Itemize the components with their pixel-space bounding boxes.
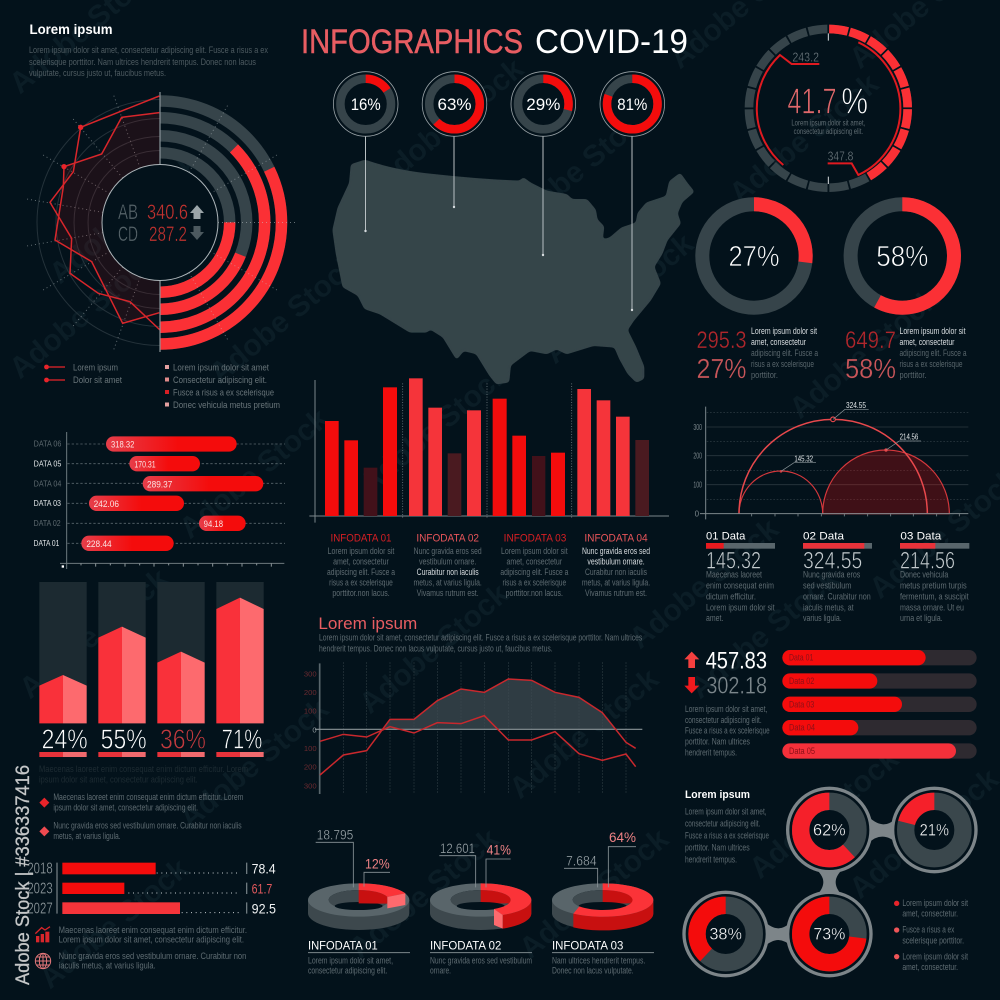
center circle values: 340.6 xyxy=(147,201,188,224)
stats block: 649.7 / 58%: 649.7 xyxy=(845,327,896,354)
center circle values: AB xyxy=(118,201,138,224)
donut: 73% xyxy=(788,892,871,976)
column: 02 data: ornare. Curabitur non xyxy=(803,591,871,601)
column: 01 data: enim consequat enim xyxy=(706,581,774,591)
text: infodata 01: risus a ex scelerisque xyxy=(329,578,393,588)
stats block: 295.3 / 27%: risus a ex scelerisque xyxy=(751,359,814,369)
bar: 71% xyxy=(216,582,264,757)
intro text: Lorem ipsum xyxy=(685,789,750,801)
stock watermark pattern: Adobe Stock xyxy=(683,562,845,705)
text: infodata 04: vestibulum ornare. xyxy=(587,557,645,567)
text: infodata 01: Lorem ipsum dolor sit xyxy=(328,546,395,556)
linked donut cluster xyxy=(684,788,976,976)
text: infodata 02: Vivamus rutrum est. xyxy=(417,588,479,598)
horizontal range bar chart: DATA 02 xyxy=(34,518,61,528)
3D donuts section xyxy=(308,827,654,976)
line chart: 200 xyxy=(304,763,317,772)
year bars: 92.5 xyxy=(252,901,276,916)
panel: intro heading and text: Lorem ipsum dolor sit amet, consectetur adipiscing elit. Fusce a risus a ex xyxy=(29,45,268,55)
bullet list: scelerisque porttitor. xyxy=(902,935,964,945)
house-shaped percent bars xyxy=(39,582,264,757)
3D donut: 64% xyxy=(552,883,653,930)
column: 02 data: iaculis metus, at xyxy=(803,602,854,612)
donut: 38% xyxy=(684,892,767,976)
text: infodata 01 xyxy=(327,532,395,598)
small donut: 63%: 63% xyxy=(438,95,472,114)
captions: Lorem ipsum dolor sit amet, xyxy=(308,955,393,965)
line chart: 200 xyxy=(304,688,317,697)
panel: radial chart xyxy=(27,92,295,352)
stock watermark pattern: Adobe Stock xyxy=(368,52,530,195)
stats block: 649.7 / 58%: porttitor. xyxy=(900,370,926,380)
stats block: 295.3 / 27%: Lorem ipsum dolor sit xyxy=(751,326,817,336)
line chart: 100 xyxy=(304,707,317,716)
description: hendrerit tempus. Donec non lacus vulputate, cursus justo ut, faucibus metus. xyxy=(319,643,553,653)
icon notes xyxy=(59,925,247,971)
stats block: 295.3 / 27%: adipiscing elit. Fusce a xyxy=(751,348,818,358)
up / down stats: 457.83 xyxy=(706,647,767,674)
bullet list: amet, consectetur. xyxy=(902,909,958,919)
horizontal range bar chart: 228.44 xyxy=(86,539,112,549)
stock watermark pattern: Adobe Stock xyxy=(783,282,945,425)
text: infodata 01: amet, consectetur xyxy=(333,557,389,567)
stats block: 649.7 / 58%: 58% xyxy=(845,353,896,384)
legend: radial chart: Fusce a risus a ex scelerisque xyxy=(173,388,274,398)
text: infodata 03 xyxy=(500,532,568,598)
line chart: 300 xyxy=(304,781,317,790)
horizontal range bar chart: DATA 03 xyxy=(34,498,61,508)
captions: INFODATA 03 xyxy=(552,938,624,952)
stats block: 649.7 / 58%: adipiscing elit. Fusce a xyxy=(900,348,966,358)
small donut: 16%: 16% xyxy=(351,95,381,114)
line chart: 100 xyxy=(304,744,317,753)
text: infodata 04: Curabitur non iaculis xyxy=(585,567,647,577)
up / down stats: consectetur adipiscing elit. xyxy=(685,715,762,725)
gauge: 41.7% xyxy=(749,29,908,188)
heading: Lorem ipsum xyxy=(318,614,417,633)
gauge: 41.7%: 41.7 xyxy=(787,80,837,121)
semicircle chart: 0 xyxy=(695,509,700,518)
year bars: 2027 xyxy=(27,900,53,917)
legend: radial chart: Lorem ipsum xyxy=(73,362,118,374)
semicircle chart xyxy=(693,400,968,519)
column: 03 data xyxy=(900,530,969,623)
stock watermark pattern: Adobe Stock xyxy=(353,357,515,500)
gauge: 41.7%: consectetur adipiscing elit. xyxy=(794,126,863,136)
donut values: 12.601 xyxy=(440,840,475,856)
text: infodata 03: Lorem ipsum dolor sit xyxy=(501,546,568,556)
year bars: 2023 xyxy=(27,881,53,898)
text: infodata 01: porttitor.non lacus. xyxy=(332,588,390,598)
year bars: 2018 xyxy=(27,861,53,878)
text: infodata 01: INFODATA 01 xyxy=(330,532,391,544)
bar: 36% xyxy=(157,582,206,757)
title: COVID-19 xyxy=(535,23,688,61)
small donut: 16% xyxy=(333,72,398,136)
stats block: 649.7 / 58% xyxy=(845,326,966,384)
pointer lines xyxy=(364,136,633,311)
captions: INFODATA 01 xyxy=(308,938,378,952)
radar chart grid and lines xyxy=(27,96,160,349)
intro text: Lorem ipsum dolor sit amet, xyxy=(685,806,767,816)
stock watermark pattern: Adobe Stock xyxy=(353,577,515,720)
stats block: 649.7 / 58%: risus a ex scelerisque xyxy=(900,359,962,369)
stock watermark pattern: Adobe Stock xyxy=(723,67,885,210)
horizontal range bar chart: DATA 04 xyxy=(34,478,61,488)
stats block: 295.3 / 27%: 295.3 xyxy=(696,327,746,354)
column: 01 data: dictum efficitur. xyxy=(706,591,756,601)
faint note: Maecenas laoreet enim consequat enim dictum efficitur. Lorem xyxy=(39,764,248,774)
title xyxy=(301,23,688,61)
progress bars: Data 02 xyxy=(789,676,814,686)
donut: 62% xyxy=(788,788,871,872)
donut values: 41% xyxy=(487,841,511,857)
diamond bullets xyxy=(39,792,243,841)
description: Lorem ipsum dolor sit amet, consectetur adipiscing elit. Fusce a risus a ex scelerisque porttitor. Nam ultrices xyxy=(319,632,643,642)
up / down stats: porttitor. Nam ultrices xyxy=(685,737,750,747)
vertical stock id: Adobe Stock | #336337416 xyxy=(12,765,34,985)
bullet list: Lorem ipsum dolor sit xyxy=(902,951,968,961)
faint note xyxy=(39,764,248,785)
intro text: porttitor. Nam ultrices xyxy=(685,842,750,852)
text: infodata 01: adipiscing elit. Fusce a xyxy=(327,567,395,577)
faint note: ipsum dolor sit amet, consectetur adipiscing elit. xyxy=(39,775,198,785)
semicircle chart: 324.55 xyxy=(846,400,866,410)
up / down stats: hendrerit tempus. xyxy=(685,748,737,758)
stock watermark pattern: Adobe Stock xyxy=(13,562,175,705)
column: 01 data: Maecenas laoreet xyxy=(706,570,762,580)
3D donut: 41% xyxy=(430,883,531,930)
text: infodata 04: INFODATA 04 xyxy=(584,532,648,544)
line chart: 300 xyxy=(304,669,317,678)
stock watermark pattern: Adobe Stock xyxy=(3,242,165,385)
captions: Nunc gravida eros sed vestibulum xyxy=(430,955,532,965)
captions: consectetur adipiscing elit. xyxy=(308,966,387,976)
progress bars: Data 03 xyxy=(789,699,814,709)
diamond bullets: metus, at varius ligula. xyxy=(53,831,121,841)
bullet list: amet, consectetur. xyxy=(902,962,958,972)
panel: intro heading and text: vulputate, cursus justo ut, faucibus metus. xyxy=(29,68,166,78)
gauge: 41.7%: 347.8 xyxy=(828,149,853,164)
text: infodata 03: adipiscing elit. Fusce a xyxy=(500,567,568,577)
captions xyxy=(308,938,654,976)
column: 02 data: 02 Data xyxy=(803,530,844,542)
panel: intro heading and text: Lorem ipsum xyxy=(30,21,112,37)
column: 02 data: sed vestibulum xyxy=(803,581,851,591)
horizontal range bar chart: DATA 01 xyxy=(34,538,59,548)
semicircle chart: 300 xyxy=(693,423,702,432)
stock watermark pattern: Adobe Stock xyxy=(173,402,335,545)
bar: 55% xyxy=(98,582,147,757)
column: 01 data xyxy=(706,530,775,623)
donut values: 7.684 xyxy=(566,852,597,868)
line chart xyxy=(304,662,642,794)
small donut: 81%: 81% xyxy=(617,95,647,114)
stock watermark pattern: Adobe Stock xyxy=(33,852,195,995)
up / down stats xyxy=(684,647,770,758)
donut: 27% xyxy=(702,204,806,308)
horizontal range bar chart: 94.18 xyxy=(204,519,223,529)
column: 01 data: Lorem ipsum dolor sit xyxy=(706,602,775,612)
horizontal range bar chart xyxy=(34,432,285,569)
progress bars: Data 01 xyxy=(789,653,813,663)
up / down stats: Fusce a risus a ex scelerisque xyxy=(685,726,770,736)
stock watermark pattern: Adobe Stock xyxy=(538,227,700,370)
semicircle chart: 200 xyxy=(693,452,702,461)
bar: 71%: 71% xyxy=(222,723,262,754)
progress bars xyxy=(782,650,977,759)
text: infodata 04: Vivamus rutrum est. xyxy=(585,588,647,598)
text: infodata 04 xyxy=(582,532,650,598)
horizontal range bar chart: DATA 06 xyxy=(34,439,61,449)
intro text xyxy=(685,789,769,864)
small donut: 29%: 29% xyxy=(526,95,560,114)
center circle values xyxy=(102,164,218,280)
captions: Donec non lacus vulputate. xyxy=(552,966,634,976)
column: 03 data: 214.56 xyxy=(900,547,955,574)
semicircle chart: 145.32 xyxy=(794,453,813,463)
horizontal range bar chart: 170.31 xyxy=(134,459,156,469)
text: infodata 02: Nunc gravida eros sed xyxy=(414,546,482,556)
legend: radial chart: Dolor sit amet xyxy=(73,375,122,386)
progress bars: Data 04 xyxy=(789,723,815,733)
description xyxy=(319,632,643,653)
gauge: 41.7%: 243.2 xyxy=(792,50,819,65)
column: 02 data: varius ligula. xyxy=(803,613,842,623)
stats block: 295.3 / 27%: 27% xyxy=(696,353,746,384)
column: 02 data: Nunc gravida eros xyxy=(803,570,861,580)
year bars xyxy=(27,861,276,917)
column: 03 data: urna et ligula. xyxy=(900,613,943,623)
progress bars: Data 05 xyxy=(789,746,815,756)
title: INFOGRAPHICS xyxy=(301,23,523,61)
text: infodata 02: INFODATA 02 xyxy=(416,532,479,544)
donut: 58% xyxy=(851,204,954,308)
donut: 21%: 21% xyxy=(920,821,949,840)
column: 01 data: amet. xyxy=(706,613,723,623)
column: 03 data: metus pretium turpis xyxy=(900,581,967,591)
captions: ornare. xyxy=(430,966,451,976)
stock watermark pattern: Adobe Stock xyxy=(743,742,905,885)
bullet notes and year bars xyxy=(27,764,276,971)
diamond bullets: Maecenas laoreet enim consequat enim dictum efficitur. Lorem xyxy=(53,792,243,802)
leader lines xyxy=(316,842,636,887)
column: 02 data xyxy=(803,530,872,623)
stats block: 649.7 / 58%: amet, consectetur xyxy=(900,337,954,347)
center circle values: 287.2 xyxy=(149,223,187,246)
semicircle chart: 100 xyxy=(693,481,702,490)
stock watermark pattern: Adobe Stock xyxy=(173,692,335,835)
column: 03 data: fermentum, a suscipit xyxy=(900,591,969,601)
text: infodata 04: Nunc gravida eros sed xyxy=(582,546,650,556)
donut values: 18.795 xyxy=(317,827,354,843)
stats block: 295.3 / 27%: amet, consectetur xyxy=(751,337,806,347)
stock watermark pattern: Adobe Stock xyxy=(43,147,205,290)
legend: radial chart: Lorem ipsum dolor sit amet xyxy=(173,362,269,374)
up / down stats: 302.18 xyxy=(706,672,767,699)
icon notes: iaculis metus, at varius ligula. xyxy=(59,961,156,971)
bar: 24% xyxy=(39,582,88,757)
text: infodata 03: amet, consectetur xyxy=(506,557,562,567)
captions: Nam ultrices hendrerit tempus. xyxy=(552,955,645,965)
small donut: 63% xyxy=(422,72,487,136)
donut: 58%: 58% xyxy=(876,241,928,273)
horizontal range bar chart: 242.06 xyxy=(94,499,119,509)
icon: rising chart xyxy=(35,927,50,942)
donut values: 64% xyxy=(609,829,636,845)
bullet list: Lorem ipsum dolor sit xyxy=(902,898,968,908)
horizontal range bar chart: 289.37 xyxy=(147,479,172,489)
data columns under semicircle chart xyxy=(706,530,969,623)
center circle values: CD xyxy=(118,223,138,246)
donut: 27%: 27% xyxy=(728,241,780,273)
bar: 36%: 36% xyxy=(160,723,206,754)
horizontal range bar chart: 318.32 xyxy=(111,439,134,449)
stock watermark pattern: Adobe Stock xyxy=(498,97,660,240)
intro text: Fusce a risus a ex scelerisque xyxy=(685,830,769,840)
line chart section xyxy=(304,614,643,794)
icon notes: Lorem ipsum dolor sit amet, consectetur adipiscing elit. xyxy=(59,935,244,945)
stock watermark pattern: Adobe Stock xyxy=(503,662,665,805)
stock watermark pattern: Adobe Stock xyxy=(623,512,785,655)
text: infodata 04: metus, at varius ligula. xyxy=(582,578,650,588)
intro text: hendrerit tempus. xyxy=(685,854,737,864)
stock watermark pattern: Adobe Stock xyxy=(203,247,365,390)
up / down stats: Lorem ipsum dolor sit amet, xyxy=(685,704,767,714)
grouped bar chart xyxy=(309,378,669,598)
small donut: 29% xyxy=(511,72,576,136)
stock watermark pattern: Adobe Stock xyxy=(513,822,675,965)
text: infodata 03: porttitor.non lacus. xyxy=(506,588,563,598)
line chart: 0 xyxy=(312,725,317,734)
year bars: 61.7 xyxy=(252,881,272,896)
icon notes: Nunc gravida eros sed vestibulum ornare. Curabitur non xyxy=(59,951,246,961)
bar: 55%: 55% xyxy=(101,723,147,754)
small donut: 81% xyxy=(600,72,665,136)
intro text: consectetur adipiscing elit. xyxy=(685,818,760,828)
semicircle chart: 214.56 xyxy=(900,432,919,442)
bullet list xyxy=(894,898,968,972)
legend: radial chart xyxy=(44,362,280,411)
donut: 21% xyxy=(893,788,976,872)
horizontal range bar chart: DATA 05 xyxy=(34,458,61,468)
concentric rings xyxy=(38,101,282,344)
column: 01 data: 145.32 xyxy=(706,547,761,574)
donut: 73%: 73% xyxy=(813,925,846,944)
column: 02 data: 324.55 xyxy=(803,547,862,574)
text: infodata 02: Curabitur non iaculis xyxy=(417,567,479,577)
column: 01 data: 01 Data xyxy=(706,530,745,542)
stats block: 295.3 / 27%: porttitor. xyxy=(751,370,778,380)
bar: 24%: 24% xyxy=(42,723,88,754)
text: infodata 03: INFODATA 03 xyxy=(504,532,566,544)
diamond bullets: Nunc gravida eros sed vestibulum ornare. Curabitur non iaculis xyxy=(53,820,242,830)
captions: INFODATA 02 xyxy=(430,938,502,952)
legend: radial chart: Consectetur adipiscing elit. xyxy=(173,375,267,386)
donut: 62%: 62% xyxy=(813,821,846,840)
column: 03 data: massa ornare. Ut eu xyxy=(900,602,964,612)
bullet list: Fusce a risus a ex xyxy=(902,925,955,935)
gauge: 41.7%: % xyxy=(841,80,868,121)
connectors xyxy=(763,817,897,947)
donut: 38%: 38% xyxy=(709,925,742,944)
year bars: 78.4 xyxy=(252,862,276,877)
3D donut: 12% xyxy=(308,883,409,930)
text: infodata 02: vestibulum ornare. xyxy=(419,557,476,567)
text: infodata 03: risus a ex scelerisque xyxy=(502,578,566,588)
icon notes: Maecenas laoreet enim consequat enim dictum efficitur. xyxy=(59,925,247,935)
panel: intro heading and text: scelerisque porttitor. Nam ultrices hendrerit tempus. Donec non lacus xyxy=(29,57,256,67)
gauge: 41.7%: Lorem ipsum dolor sit amet, xyxy=(791,117,865,127)
legend: radial chart: Donec vehicula metus pretium xyxy=(173,400,280,411)
panel: intro heading and text xyxy=(29,21,268,78)
donut values xyxy=(317,827,636,871)
column: 03 data: 03 Data xyxy=(900,530,941,542)
text: infodata 02: metus, at varius ligula. xyxy=(413,578,482,588)
stats block: 295.3 / 27% xyxy=(696,326,818,384)
text: infodata 02 xyxy=(413,532,482,598)
column: 03 data: Donec vehicula xyxy=(900,570,948,580)
diamond bullets: ipsum dolor sit amet, consectetur adipiscing elit. xyxy=(53,803,198,813)
donut values: 12% xyxy=(365,855,390,871)
icon: globe xyxy=(35,953,51,969)
stats block: 649.7 / 58%: Lorem ipsum dolor sit xyxy=(900,326,966,336)
US map xyxy=(333,161,693,383)
stock watermark pattern: Adobe Stock xyxy=(343,822,505,965)
